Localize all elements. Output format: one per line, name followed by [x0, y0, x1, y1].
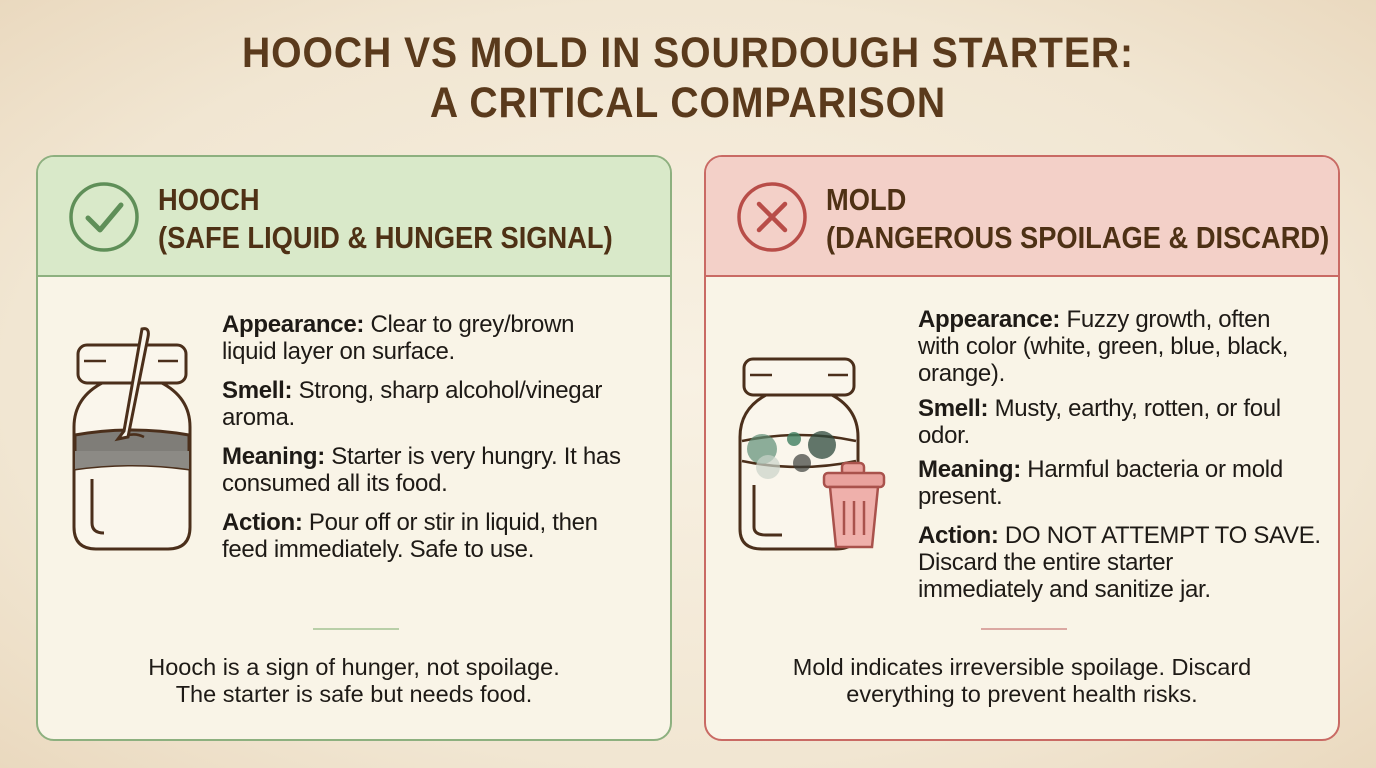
- mold header: [706, 157, 1338, 277]
- mold heading: [826, 182, 1329, 255]
- mold details: Appearance: Fuzzy growth, often: [918, 306, 1270, 333]
- icon: cross: [737, 182, 807, 252]
- hooch details: [222, 311, 621, 563]
- mold details: Discard the entire starter: [918, 549, 1173, 576]
- mold details: Smell: Musty, earthy, rotten, or foul: [918, 395, 1281, 422]
- mold summary: Mold indicates irreversible spoilage. Discard: [793, 654, 1251, 680]
- icon: check mark: [69, 182, 139, 252]
- mold details: Action: DO NOT ATTEMPT TO SAVE.: [918, 522, 1321, 549]
- panel: hooch: [36, 155, 672, 741]
- mold details: with color (white, green, blue, black,: [918, 333, 1288, 360]
- mold details: immediately and sanitize jar.: [918, 576, 1211, 603]
- mold details: orange).: [918, 360, 1005, 387]
- hooch heading: HOOCH: [158, 182, 260, 217]
- hooch details: consumed all its food.: [222, 470, 448, 497]
- title: A CRITICAL COMPARISON: [430, 79, 946, 127]
- panel: mold: [704, 155, 1340, 741]
- mold summary: everything to prevent health risks.: [846, 681, 1198, 707]
- hooch details: Smell: Strong, sharp alcohol/vinegar: [222, 377, 602, 404]
- hooch heading: (SAFE LIQUID & HUNGER SIGNAL): [158, 220, 613, 255]
- mold details: present.: [918, 483, 1002, 510]
- hooch header: [38, 157, 670, 277]
- hooch details: feed immediately. Safe to use.: [222, 536, 534, 563]
- hooch summary: [148, 654, 560, 707]
- hooch details: aroma.: [222, 404, 295, 431]
- mold heading: (DANGEROUS SPOILAGE & DISCARD): [826, 220, 1329, 255]
- mold summary: [793, 654, 1251, 707]
- hooch details: liquid layer on surface.: [222, 338, 455, 365]
- title: [242, 29, 1134, 127]
- mold details: [918, 306, 1321, 603]
- icon: jar with hooch: [72, 327, 192, 550]
- hooch heading: [158, 182, 613, 255]
- hooch details: Meaning: Starter is very hungry. It has: [222, 443, 621, 470]
- hooch details: Action: Pour off or stir in liquid, then: [222, 509, 598, 536]
- hooch summary: Hooch is a sign of hunger, not spoilage.: [148, 654, 560, 680]
- mold details: odor.: [918, 422, 970, 449]
- hooch summary: The starter is safe but needs food.: [176, 681, 532, 707]
- hooch details: Appearance: Clear to grey/brown: [222, 311, 574, 338]
- title: HOOCH VS MOLD IN SOURDOUGH STARTER:: [242, 29, 1134, 77]
- mold details: Meaning: Harmful bacteria or mold: [918, 456, 1283, 483]
- mold heading: MOLD: [826, 182, 906, 217]
- icon: moldy jar and trash can: [738, 358, 886, 550]
